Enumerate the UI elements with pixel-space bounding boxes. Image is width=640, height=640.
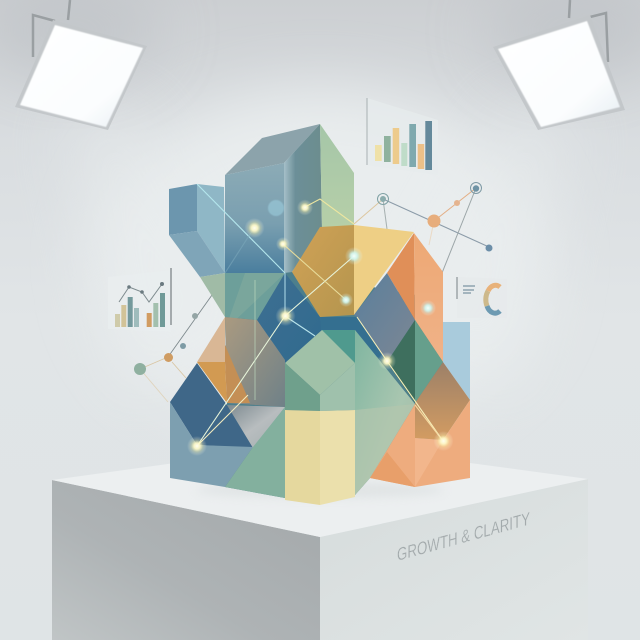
left network graph: [134, 295, 212, 402]
teal middle column: [322, 330, 415, 495]
back left blue block: [169, 184, 225, 277]
right floating donut chart: [457, 277, 507, 318]
tall glass column: [225, 124, 354, 273]
pedestal: [52, 440, 588, 640]
orange base: [370, 400, 470, 487]
top floating bar chart: [367, 98, 438, 175]
right network graph: [354, 182, 492, 308]
yellow column: [285, 410, 355, 505]
pedestal label: GROWTH & CLARITY: [397, 508, 530, 565]
lower left green glass: [200, 273, 285, 330]
left orange block: [197, 317, 250, 403]
blue-grey diamond: [354, 273, 415, 362]
left spotlight: [15, 0, 147, 130]
lower left dark blue block: [170, 363, 285, 498]
dark green diamond: [387, 320, 443, 403]
orange upper block: [387, 233, 443, 362]
right blue column: [443, 322, 470, 400]
left floating bar and line chart: [108, 268, 171, 332]
glowing nodes: [187, 200, 454, 456]
donut: [486, 285, 500, 313]
ochre and yellow block: [292, 225, 414, 317]
house-shaped green block: [285, 330, 355, 411]
glowing connection lines: [197, 184, 443, 446]
sculpture backing: [225, 272, 443, 498]
central blue diamond: [257, 273, 387, 363]
geometric block sculpture: [169, 124, 470, 505]
brown diamond: [415, 362, 470, 440]
brown glass panel: [225, 317, 285, 407]
right spotlight: [493, 0, 625, 130]
